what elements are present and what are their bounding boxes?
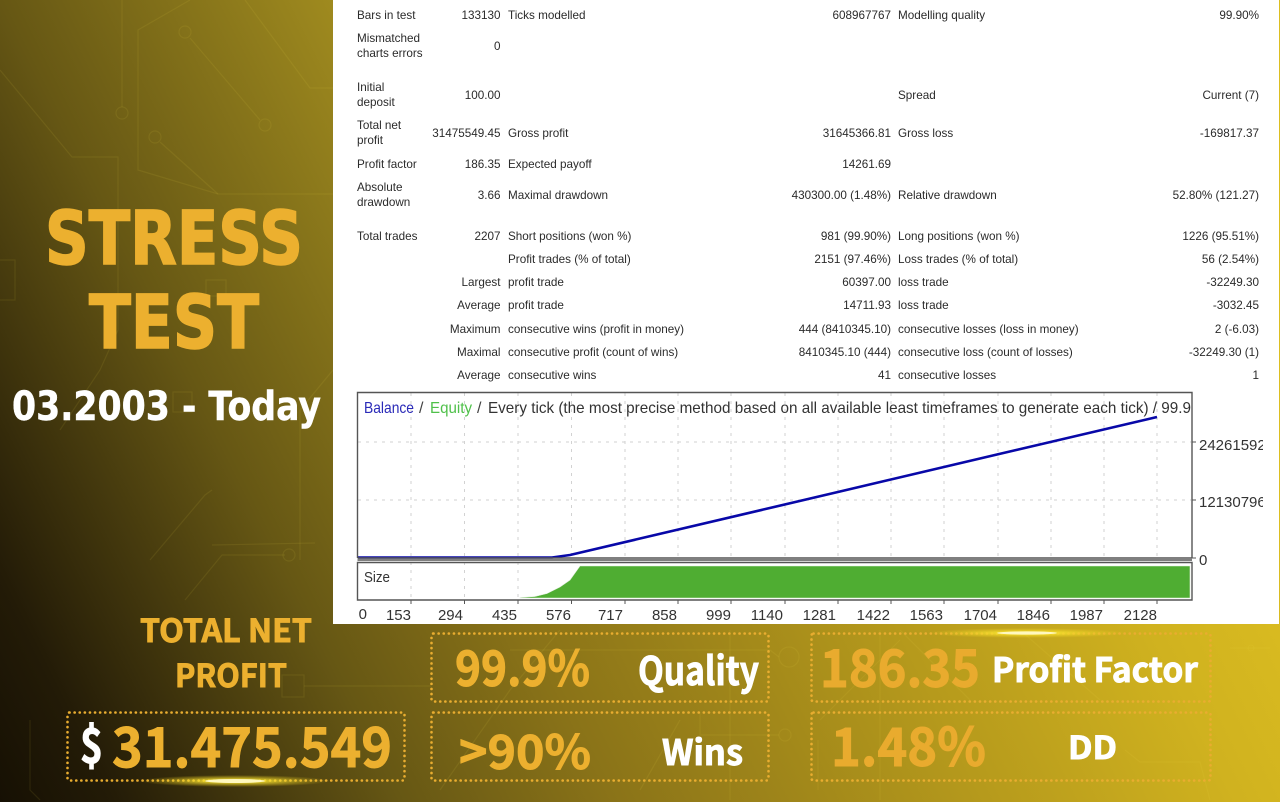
title: stress test: STRESS (45, 196, 303, 282)
title: stress test: TEST (89, 280, 259, 366)
row: profit factor: Expected payoff (508, 158, 592, 171)
row: absolute drawdown: 3.66 (478, 189, 500, 202)
chart title legend: Every tick (the most precise method based on all available least timeframes to generate each tick) / 99.90% (488, 400, 1213, 417)
date range subtitle: 03.2003 - Today (12, 384, 321, 430)
size area (520, 566, 1190, 598)
row: largest: Largest (462, 276, 501, 289)
row: absolute drawdown: 52.80% (121.27) (1173, 189, 1259, 202)
row: mismatched charts errors (357, 32, 501, 60)
row: maximum consecutive: consecutive losses (loss in money) (898, 323, 1079, 336)
row: profit factor: 186.35 (465, 158, 501, 171)
row: total net profit (357, 119, 1259, 147)
row: profit trades: Loss trades (% of total) (898, 253, 1018, 266)
y axis labels (1192, 437, 1266, 569)
chart title legend: Equity (430, 400, 472, 417)
size pane (358, 562, 1192, 600)
metric: drawdown (812, 706, 1210, 782)
glow: under profit box (140, 775, 330, 787)
row: total net profit: 31475549.45 (432, 127, 501, 140)
metric: profit factor: 186.35 (820, 627, 980, 702)
y axis labels: 24261592 (1199, 437, 1266, 454)
row: total trades: Long positions (won %) (898, 230, 1020, 243)
row: initial deposit: Current (7) (1202, 89, 1259, 102)
row: mismatched charts errors: charts errors (357, 47, 423, 60)
metric: total net profit heading: PROFIT (175, 651, 287, 697)
row: initial deposit (357, 81, 1259, 109)
row: average consecutive: 1 (1252, 369, 1259, 382)
y axis labels: 12130796 (1199, 494, 1266, 511)
row: maximum consecutive: 2 (-6.03) (1215, 323, 1259, 336)
metric: wins: >90% (459, 714, 591, 783)
row: absolute drawdown: Maximal drawdown (508, 189, 608, 202)
chart: balance curve (358, 392, 1266, 624)
row: absolute drawdown: Absolute (357, 181, 402, 194)
row: largest: 60397.00 (842, 276, 891, 289)
metric: total net profit heading: TOTAL NET (140, 606, 312, 652)
x axis labels: 0 (359, 606, 367, 623)
row: absolute drawdown: Relative drawdown (898, 189, 997, 202)
balance line (358, 417, 1157, 558)
x axis labels: 1140 (751, 607, 783, 624)
row: maximal consecutive: consecutive loss (count of losses) (898, 346, 1073, 359)
row: maximum consecutive: consecutive wins (profit in money) (508, 323, 684, 336)
metric: total net profit heading (140, 606, 312, 697)
panel: report sheet (333, 0, 1279, 624)
row: total net profit: Gross profit (508, 127, 569, 140)
row: maximum consecutive: Maximum (450, 323, 500, 336)
row: total net profit: profit (357, 134, 384, 147)
row: maximal consecutive: 8410345.10 (444) (799, 346, 891, 359)
x axis labels: 1987 (1070, 607, 1103, 624)
row: maximum consecutive (450, 323, 1259, 336)
size pane: Size (364, 569, 390, 586)
row: total net profit: 31645366.81 (823, 127, 891, 140)
row: initial deposit: Spread (898, 89, 936, 102)
row: bars in test: 608967767 (832, 9, 891, 22)
row: average consecutive: Average (457, 369, 500, 382)
row: average consecutive (457, 369, 1259, 382)
row: average trade: profit trade (508, 299, 564, 312)
x axis labels: 1563 (910, 607, 943, 624)
row: average trade: Average (457, 299, 500, 312)
row: profit factor: Profit factor (357, 158, 417, 171)
row: average trade: -3032.45 (1213, 299, 1259, 312)
metric: profit factor: Profit Factor (992, 643, 1198, 692)
metric: quality (432, 630, 768, 702)
row: absolute drawdown: 430300.00 (1.48%) (792, 189, 891, 202)
row: total trades: 1226 (95.51%) (1182, 230, 1259, 243)
x axis labels: 717 (598, 607, 623, 624)
title: stress test (45, 196, 303, 366)
x axis labels: 858 (652, 607, 677, 624)
row: profit factor (357, 158, 891, 171)
row: profit trades: 2151 (97.46%) (814, 253, 891, 266)
metric: total net profit value: 31.475.549 (112, 703, 392, 783)
x axis labels: 1846 (1017, 607, 1050, 624)
row: average trade: loss trade (898, 299, 949, 312)
row: total net profit: -169817.37 (1200, 127, 1259, 140)
row: maximal consecutive: Maximal (457, 346, 500, 359)
metric: wins (432, 712, 768, 783)
row: profit factor: 14261.69 (842, 158, 891, 171)
row: maximal consecutive: consecutive profit (count of wins) (508, 346, 678, 359)
row: bars in test: Ticks modelled (508, 9, 586, 22)
metric: wins: Wins (662, 725, 743, 776)
x axis labels (359, 600, 1157, 624)
x axis labels: 999 (706, 607, 731, 624)
x axis labels: 294 (438, 607, 463, 624)
row: average trade: 14711.93 (843, 299, 891, 312)
chart title legend: / (477, 400, 482, 417)
metric: drawdown: 1.48% (831, 706, 986, 782)
x axis labels: 2128 (1124, 607, 1157, 624)
row: profit trades: Profit trades (% of total) (508, 253, 631, 266)
row: average consecutive: consecutive losses (898, 369, 996, 382)
x axis labels: 435 (492, 607, 517, 624)
chart frame (358, 392, 1192, 560)
x axis labels: 576 (546, 607, 571, 624)
row: average consecutive: consecutive wins (508, 369, 597, 382)
y axis labels: 0 (1199, 552, 1207, 569)
row: initial deposit: Initial (357, 81, 384, 94)
row: maximal consecutive (457, 346, 1259, 359)
row: largest: -32249.30 (1206, 276, 1259, 289)
row: bars in test: Modelling quality (898, 9, 985, 22)
row: initial deposit: deposit (357, 96, 395, 109)
x axis labels: 153 (386, 607, 411, 624)
row: total trades (357, 230, 1259, 243)
row: total net profit: Gross loss (898, 127, 953, 140)
row: absolute drawdown: drawdown (357, 196, 410, 209)
row: bars in test: Bars in test (357, 9, 416, 22)
metric: quality: 99.9% (455, 630, 590, 701)
row: largest: loss trade (898, 276, 949, 289)
row: total trades: 2207 (474, 230, 500, 243)
row: total trades: Short positions (won %) (508, 230, 632, 243)
row: profit trades: 56 (2.54%) (1202, 253, 1259, 266)
metric: total net profit value: $ (80, 707, 103, 777)
x axis labels: 1281 (803, 607, 836, 624)
row: absolute drawdown (357, 181, 1259, 209)
metric: drawdown: DD (1068, 723, 1117, 769)
row: total net profit: Total net (357, 119, 402, 132)
row: mismatched charts errors: Mismatched (357, 32, 420, 45)
row: largest: profit trade (508, 276, 564, 289)
x axis labels: 1704 (964, 607, 997, 624)
row: total trades: Total trades (357, 230, 418, 243)
row: average consecutive: 41 (878, 369, 891, 382)
row: average trade (457, 299, 1259, 312)
glow: above profit factor box (927, 628, 1127, 638)
row: initial deposit: 100.00 (465, 89, 501, 102)
chart title legend: / (419, 400, 424, 417)
row: mismatched charts errors: 0 (494, 40, 501, 53)
row: largest (462, 276, 1259, 289)
row: bars in test: 99.90% (1219, 9, 1259, 22)
x axis labels: 1422 (857, 607, 890, 624)
row: profit trades (508, 253, 1259, 266)
table: backtest report (357, 9, 1259, 382)
chart title legend: Balance (364, 400, 414, 417)
row: total trades: 981 (99.90%) (821, 230, 891, 243)
metric: profit factor (812, 627, 1210, 702)
row: maximal consecutive: -32249.30 (1) (1189, 346, 1259, 359)
row: bars in test (357, 9, 1259, 22)
row: bars in test: 133130 (461, 9, 501, 22)
row: maximum consecutive: 444 (8410345.10) (799, 323, 891, 336)
metric: quality: Quality (638, 641, 759, 697)
